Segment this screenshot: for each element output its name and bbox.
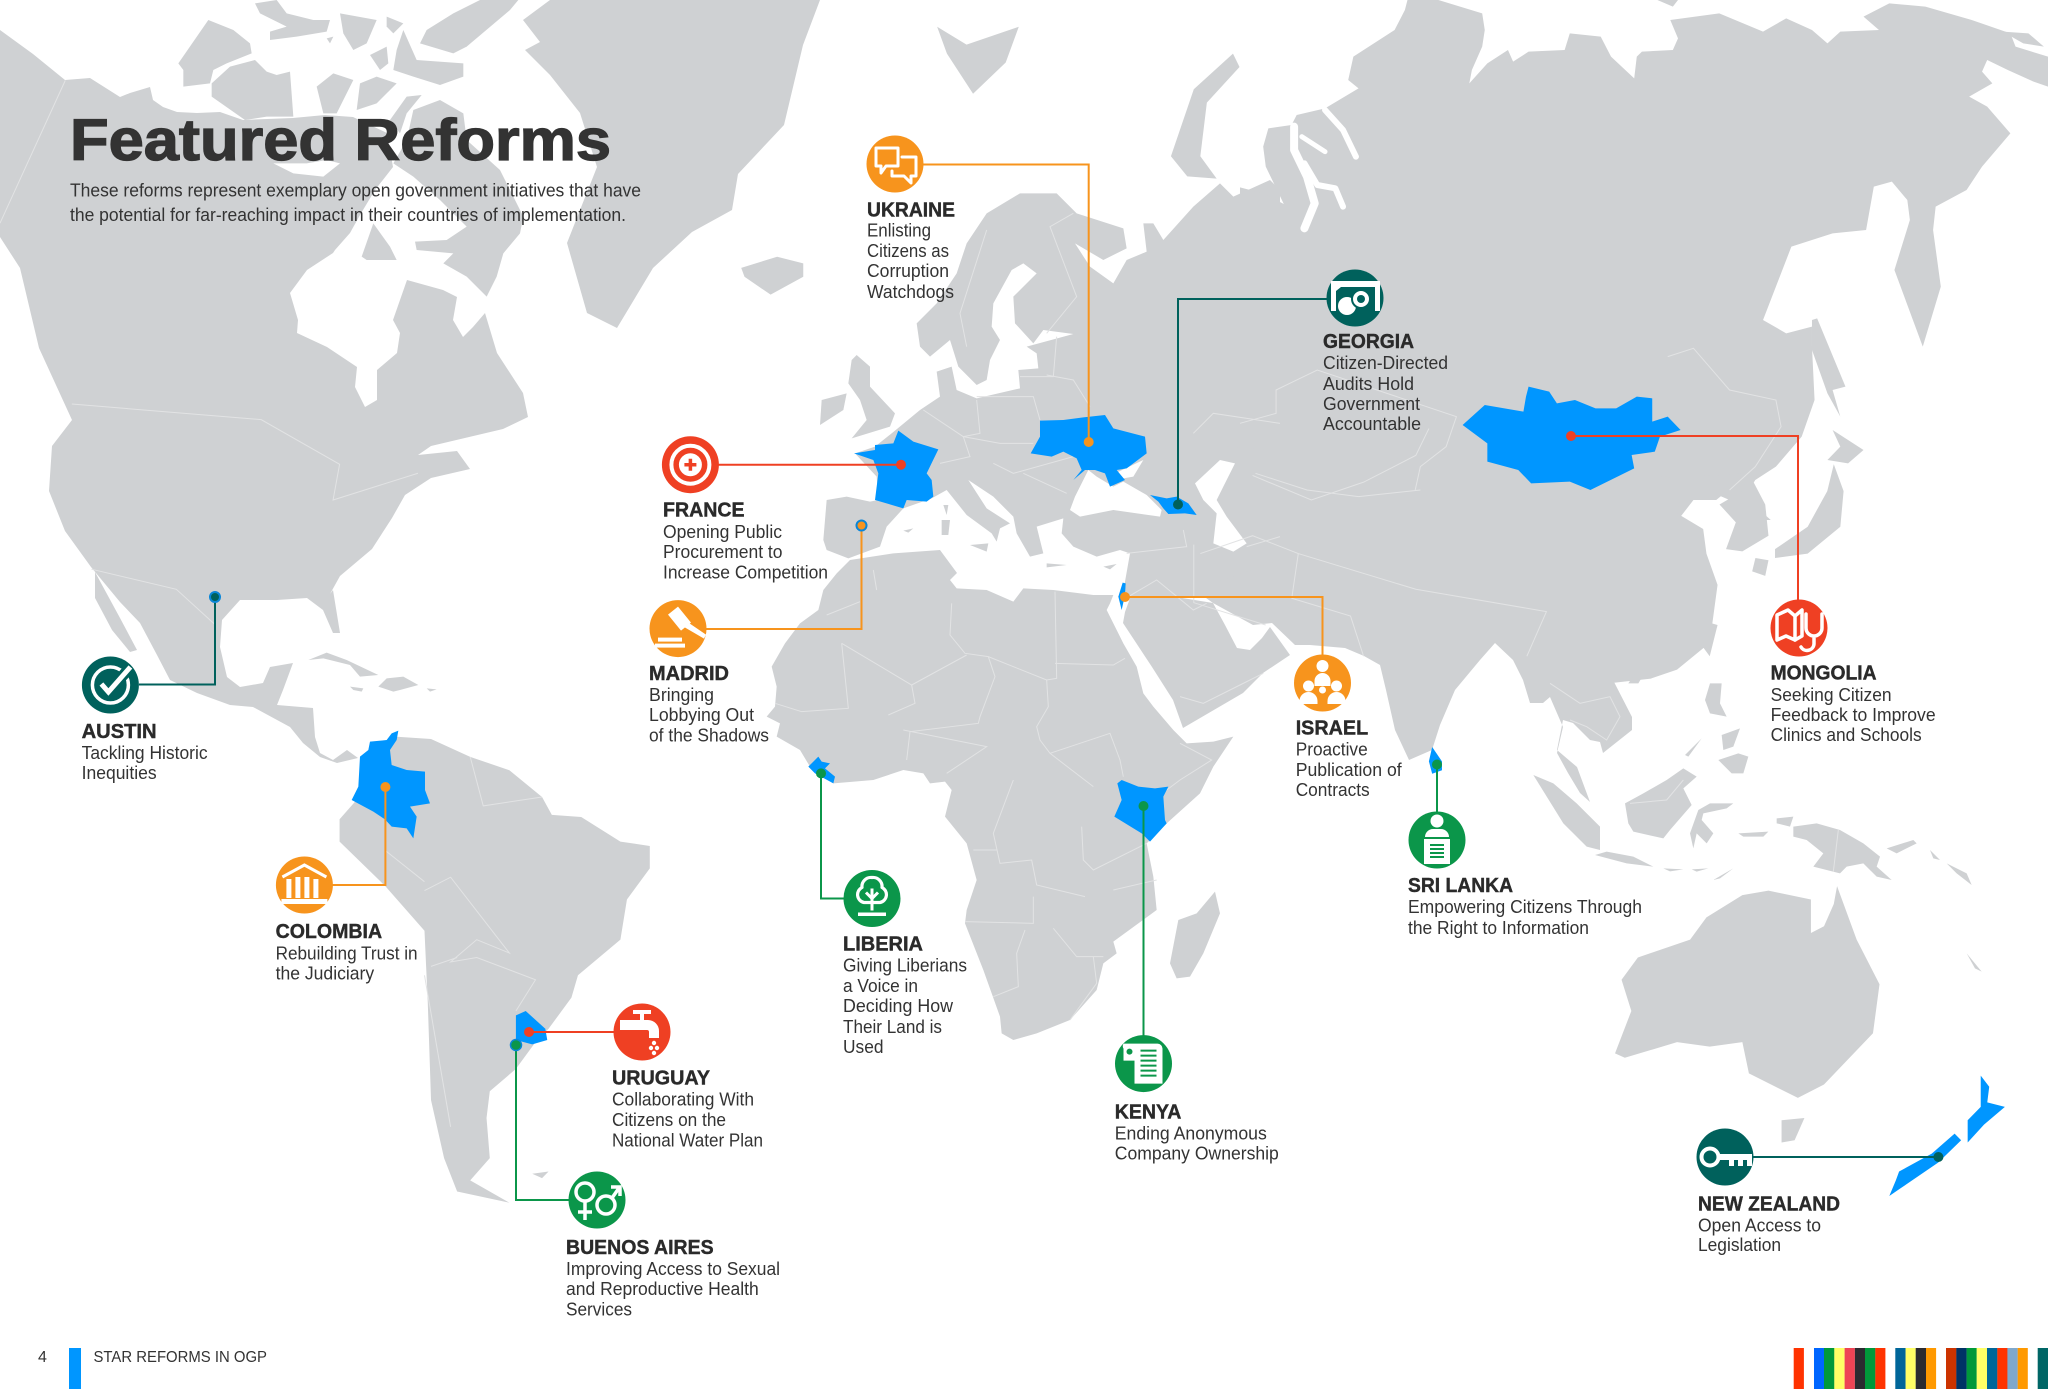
description: Government <box>1323 394 1420 414</box>
intro text: These reforms represent exemplary open government initiatives that have <box>70 180 641 200</box>
marker <box>816 768 826 778</box>
callout: france <box>662 436 906 583</box>
connector <box>332 787 385 885</box>
heading: GEORGIA <box>1323 331 1414 353</box>
description: Seeking Citizen <box>1771 685 1892 705</box>
description <box>649 685 769 746</box>
description: Lobbying Out <box>649 705 754 725</box>
heading: UKRAINE <box>867 200 955 222</box>
heading: BUENOS AIRES <box>566 1237 714 1259</box>
marker <box>1933 1152 1943 1162</box>
description: National Water Plan <box>612 1131 763 1151</box>
description <box>566 1259 780 1319</box>
description: Citizen-Directed <box>1323 353 1448 373</box>
connector <box>922 164 1089 442</box>
callout: uruguay <box>524 1004 763 1151</box>
callout: georgia <box>1173 270 1448 510</box>
connector <box>706 526 862 629</box>
description: Tackling Historic <box>82 743 208 763</box>
description: Corruption <box>867 261 949 281</box>
description: Feedback to Improve <box>1771 705 1936 725</box>
country: ukraine <box>1031 415 1147 487</box>
description: Company Ownership <box>1115 1144 1279 1164</box>
connector <box>139 597 215 684</box>
description: of the Shadows <box>649 726 769 746</box>
marker <box>1138 801 1148 811</box>
intro text <box>70 180 641 225</box>
description <box>612 1090 763 1151</box>
description <box>1115 1124 1279 1164</box>
description: Their Land is <box>843 1017 942 1037</box>
callout: new zealand <box>1696 1128 1943 1255</box>
description: a Voice in <box>843 976 918 996</box>
connector <box>1752 1156 1938 1158</box>
description <box>867 221 954 302</box>
marker <box>510 1040 522 1050</box>
icon: money and coins <box>1326 270 1384 326</box>
country: france <box>854 431 938 508</box>
country: colombia <box>352 731 430 838</box>
callout: liberia <box>816 768 967 1057</box>
marker <box>1120 592 1130 602</box>
icon: speech bubbles <box>866 136 924 192</box>
heading: MADRID <box>649 663 729 685</box>
country: kenya <box>1114 780 1168 842</box>
country: sri lanka <box>1429 747 1442 774</box>
connector <box>516 1045 570 1200</box>
description: Rebuilding Trust in <box>276 944 418 964</box>
heading: KENYA <box>1115 1102 1181 1124</box>
callout: israel <box>1120 592 1403 800</box>
description <box>1296 740 1403 800</box>
description: Improving Access to Sexual <box>566 1259 780 1279</box>
description: Bringing <box>649 685 714 705</box>
icon: courthouse <box>276 856 333 914</box>
description: Open Access to <box>1698 1216 1821 1236</box>
callout: colombia <box>276 782 418 984</box>
description: Giving Liberians <box>843 956 967 976</box>
footer label: STAR REFORMS IN OGP <box>94 1349 267 1366</box>
heading: AUSTIN <box>82 721 157 743</box>
description: Enlisting <box>867 221 931 241</box>
country: new zealand <box>1889 1076 2005 1196</box>
icon: water tap <box>614 1004 670 1060</box>
country: israel <box>1118 583 1126 610</box>
callout: buenos aires <box>510 1040 780 1319</box>
description: Citizens as <box>867 241 949 261</box>
description: Empowering Citizens Through <box>1408 897 1642 917</box>
country: liberia <box>808 757 835 783</box>
description <box>276 944 418 984</box>
description: and Reproductive Health <box>566 1279 759 1299</box>
callout: sri lanka <box>1408 760 1642 938</box>
description: Clinics and Schools <box>1771 725 1922 745</box>
callout: kenya <box>1115 801 1279 1164</box>
icon: scroll document <box>1115 1035 1172 1092</box>
description <box>663 522 828 583</box>
description: Watchdogs <box>867 282 954 302</box>
icon: group of people <box>1294 654 1351 712</box>
icon: tree <box>844 870 900 927</box>
intro text: the potential for far-reaching impact in their countries of implementation. <box>70 205 626 225</box>
connector <box>718 464 901 466</box>
heading: NEW ZEALAND <box>1698 1194 1840 1216</box>
description <box>82 743 208 783</box>
heading: SRI LANKA <box>1408 875 1513 897</box>
marker <box>380 782 390 792</box>
country: georgia <box>1150 495 1197 515</box>
description <box>843 956 967 1057</box>
footer <box>38 1348 267 1389</box>
description: the Right to Information <box>1408 918 1589 938</box>
icon: target with cross <box>662 436 719 493</box>
description: Services <box>566 1299 632 1319</box>
description: Inequities <box>82 763 157 783</box>
description <box>1323 353 1448 434</box>
footer accent bar <box>69 1348 81 1389</box>
marker <box>524 1027 534 1037</box>
connector <box>1142 806 1144 1036</box>
description: Procurement to <box>663 542 782 562</box>
connector <box>1436 764 1438 812</box>
description: Citizens on the <box>612 1110 726 1130</box>
marker <box>896 460 906 470</box>
description: Collaborating With <box>612 1090 754 1110</box>
callout: ukraine <box>866 136 1094 447</box>
icon: gender symbols <box>568 1172 626 1228</box>
connector <box>529 1031 615 1033</box>
marker <box>1173 500 1183 510</box>
description <box>1408 897 1642 938</box>
callout: madrid <box>649 520 866 746</box>
description: Deciding How <box>843 996 954 1016</box>
icon: person with document <box>1408 812 1466 868</box>
description <box>1771 685 1936 745</box>
heading: MONGOLIA <box>1771 662 1877 684</box>
heading: FRANCE <box>663 500 745 522</box>
connector <box>821 773 845 898</box>
country: uruguay <box>516 1011 547 1044</box>
connector <box>1571 436 1798 600</box>
callout: mongolia <box>1566 431 1936 745</box>
highlighted countries <box>352 387 2005 1196</box>
marker <box>210 592 220 602</box>
marker <box>1566 431 1576 441</box>
description: Proactive <box>1296 740 1368 760</box>
icon: book and stethoscope <box>1770 600 1828 656</box>
description: Ending Anonymous <box>1115 1124 1267 1144</box>
description: Increase Competition <box>663 563 828 583</box>
description: Accountable <box>1323 414 1421 434</box>
heading: ISRAEL <box>1296 718 1368 740</box>
description: Audits Hold <box>1323 374 1414 394</box>
marker <box>856 520 866 530</box>
callout: austin <box>82 592 220 783</box>
colour stripe strip <box>1794 1348 2048 1389</box>
icon: gavel <box>650 600 706 657</box>
country: mongolia <box>1463 387 1681 490</box>
icon: check mark <box>82 656 139 714</box>
description: Legislation <box>1698 1235 1781 1255</box>
marker <box>1084 437 1094 447</box>
heading: LIBERIA <box>843 934 923 956</box>
heading: COLOMBIA <box>276 921 382 943</box>
description: Publication of <box>1296 760 1403 780</box>
description: the Judiciary <box>276 964 374 984</box>
connector <box>1178 299 1327 504</box>
icon: key <box>1696 1128 1754 1186</box>
description: Opening Public <box>663 522 782 542</box>
description: Contracts <box>1296 780 1370 800</box>
description: Used <box>843 1037 884 1057</box>
heading: URUGUAY <box>612 1068 711 1090</box>
connector <box>1125 597 1322 656</box>
page number: 4 <box>38 1349 47 1366</box>
description <box>1698 1216 1821 1255</box>
marker <box>1432 760 1442 770</box>
title: Featured Reforms <box>70 108 611 173</box>
